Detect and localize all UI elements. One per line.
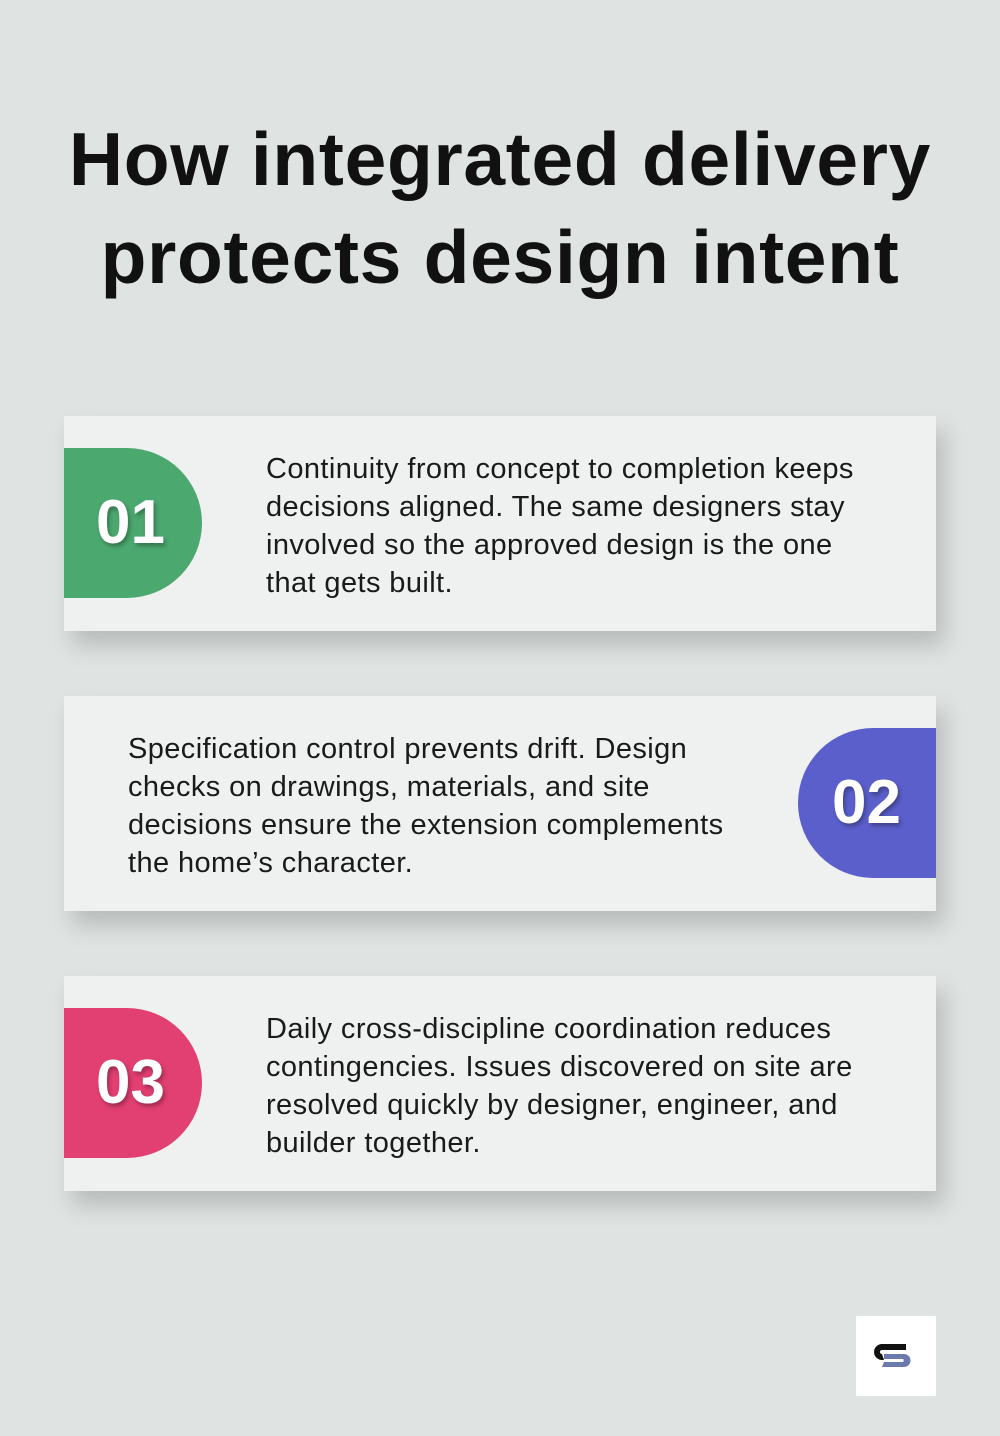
text 03: resolved quickly by designer, engineer, and [266,1089,838,1121]
title: protects design intent [101,215,899,299]
badge 02 [798,728,936,878]
text 01: that gets built. [266,567,453,599]
badge 03 [64,1008,202,1158]
text 02: the home’s character. [128,847,413,879]
title [69,117,931,299]
text 01 [266,453,854,599]
text 02: Specification control prevents drift. Design [128,733,687,765]
badge 02: 02 [832,768,901,837]
panel: card 02 [64,696,936,911]
text 03: builder together. [266,1127,481,1159]
badge 01: 01 [96,488,165,557]
text 02 [128,733,724,879]
text 03: Daily cross-discipline coordination reduces [266,1013,831,1045]
title: How integrated delivery [69,117,931,201]
badge 03: 03 [96,1048,165,1117]
logo [856,1316,936,1396]
text 01: decisions aligned. The same designers stay [266,491,845,523]
text 01: Continuity from concept to completion keeps [266,453,854,485]
text 01: involved so the approved design is the one [266,529,833,561]
text 03 [266,1013,853,1159]
badge 01 [64,448,202,598]
text 03: contingencies. Issues discovered on site are [266,1051,853,1083]
text 02: decisions ensure the extension complements [128,809,724,841]
panel: card 01 [64,416,936,631]
text 02: checks on drawings, materials, and site [128,771,650,803]
panel: card 03 [64,976,936,1191]
